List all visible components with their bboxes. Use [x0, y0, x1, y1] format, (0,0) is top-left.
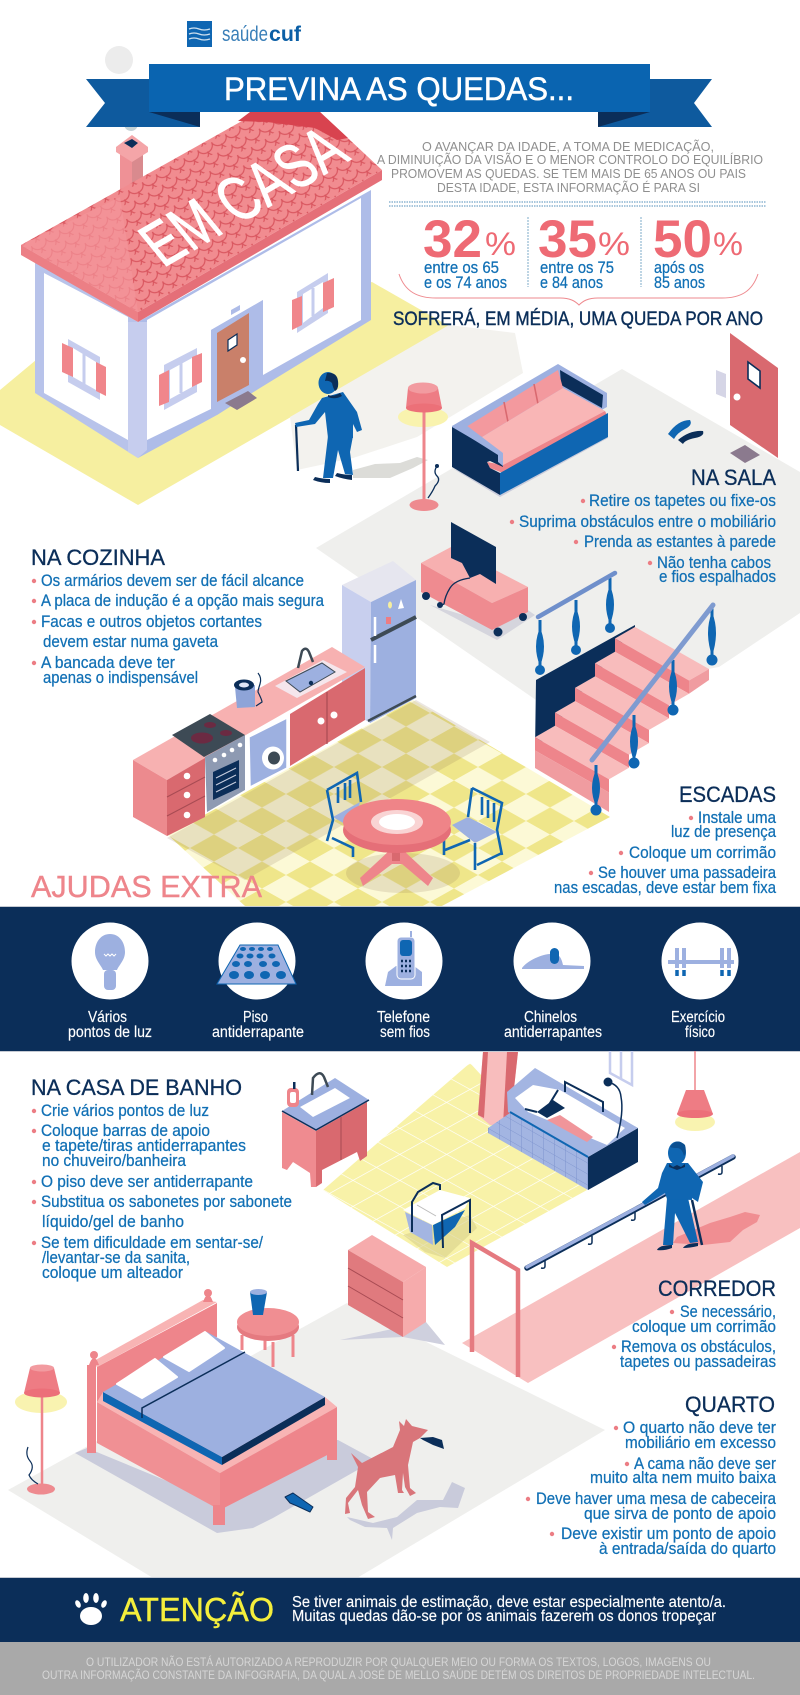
headboard — [97, 1303, 217, 1402]
stove — [172, 714, 245, 812]
list: Se tem dificuldade em sentar-se/ — [41, 1234, 263, 1252]
stat: 35%: % — [598, 226, 630, 262]
sofa back cushions — [466, 370, 563, 437]
handrail — [527, 1156, 733, 1268]
shower curtain — [478, 1052, 518, 1125]
stat: 50%: 85 anos — [654, 274, 705, 292]
hanging lamp — [675, 1051, 715, 1131]
item: exercicio — [662, 922, 738, 1041]
list: A cama não deve ser — [634, 1455, 776, 1473]
doormat — [730, 445, 760, 463]
item: piso: antiderrapante — [212, 1024, 304, 1041]
sofa left arm — [452, 427, 503, 495]
stat: 50% — [653, 210, 743, 292]
stat: 50%: % — [713, 226, 743, 262]
list: O quarto não deve ter — [623, 1419, 776, 1437]
person shadow — [353, 457, 428, 478]
heading: ESCADAS — [679, 782, 776, 807]
kitchen checker floor — [168, 700, 610, 907]
list: tapetes ou passadeiras — [620, 1353, 776, 1371]
item: luz: pontos de luz — [68, 1024, 152, 1041]
intro text: O AVANÇAR DA IDADE, A TOMA DE MEDICAÇÃO, — [422, 139, 714, 154]
intro text — [377, 139, 763, 195]
list: que sirva de ponto de apoio — [584, 1505, 776, 1523]
list — [32, 572, 325, 687]
stat: 50%: 50 — [653, 210, 712, 269]
list: Se houver uma passadeira — [598, 864, 777, 882]
window: left wall — [62, 339, 106, 400]
icon: slipper — [522, 948, 584, 969]
chimney — [116, 135, 148, 205]
list: Coloque barras de apoio — [41, 1122, 210, 1140]
right chair — [444, 788, 502, 870]
fridge — [342, 561, 416, 723]
sink — [275, 649, 347, 698]
message — [292, 1594, 726, 1625]
slipper on floor — [285, 1493, 313, 1512]
floor lamp — [398, 382, 448, 511]
icon: non-slip mat — [217, 945, 296, 984]
panel: atencao band — [0, 1577, 800, 1642]
list: Coloque um corrimão — [629, 844, 776, 862]
item: telefone: Telefone — [377, 1009, 430, 1026]
stats caption: SOFRERÁ, EM MÉDIA, UMA QUEDA POR ANO — [393, 309, 763, 330]
sofa front — [500, 413, 608, 495]
list: Prenda as estantes à parede — [584, 533, 776, 551]
list — [510, 492, 776, 586]
icon: bulb — [95, 934, 125, 990]
list: Não tenha cabos — [657, 554, 771, 572]
list: Substitua os sabonetes por sabonete — [41, 1193, 292, 1211]
doormat — [225, 391, 257, 410]
dog shadow — [347, 1482, 465, 1540]
door frame — [472, 1243, 518, 1377]
list: muito alta nem muito baixa — [590, 1469, 777, 1487]
list: coloque um corrimão — [632, 1318, 776, 1336]
panel: na sala — [510, 465, 776, 586]
sofa frame — [452, 364, 607, 465]
stat: 32%: entre os 65 — [424, 259, 499, 277]
panel: na casa de banho — [31, 1075, 292, 1282]
stat: 32%: % — [485, 226, 516, 262]
stat: 32% — [423, 210, 516, 292]
panel: ajudas extra band — [0, 906, 800, 1052]
list: nas escadas, deve estar bem fixa — [554, 879, 777, 897]
list: Deve haver uma mesa de cabeceira — [536, 1490, 777, 1508]
illustration: house — [21, 112, 382, 458]
window: right wall near — [159, 348, 202, 410]
roof label: EM CASA — [125, 113, 361, 279]
item: exercicio: Exercício — [671, 1009, 725, 1026]
list: mobiliário em excesso — [625, 1434, 776, 1452]
nightstand — [237, 1289, 299, 1367]
item: luz: Vários — [88, 1009, 127, 1026]
list — [612, 1303, 776, 1371]
counter left face — [133, 760, 167, 836]
yellow garden ground — [0, 282, 449, 505]
statistics — [393, 210, 763, 330]
table legs — [360, 850, 433, 886]
illustration: bathroom vanity — [282, 1073, 369, 1187]
item: piso — [212, 922, 304, 1041]
left railing — [535, 573, 615, 675]
stat: 35%: 35 — [538, 210, 597, 269]
heading: CORREDOR — [658, 1276, 776, 1301]
bedside lamp — [15, 1364, 67, 1494]
kitchen counter shadow — [167, 700, 490, 880]
doily — [371, 810, 423, 834]
person holding handrail — [642, 1141, 703, 1250]
dog — [345, 1419, 444, 1519]
shower hose — [608, 1082, 622, 1138]
list: no chuveiro/banheira — [42, 1152, 187, 1170]
chimney smoke — [105, 46, 139, 131]
intro text: A DIMINUIÇÃO DA VISÃO E O MENOR CONTROLO DO EQUILÍBRIO — [377, 152, 763, 167]
footer legal note — [0, 1642, 800, 1695]
right railing — [590, 605, 718, 816]
item: chinelos — [504, 922, 602, 1041]
icon: paw — [74, 1593, 108, 1625]
logo: saúde — [222, 23, 268, 46]
pillows — [117, 1359, 177, 1398]
mattress — [103, 1392, 222, 1465]
panel: escadas — [554, 782, 777, 897]
counter drawers — [167, 758, 205, 836]
panel: quarto — [526, 1392, 777, 1558]
list — [554, 809, 777, 897]
list: A placa de indução é a opção mais segura — [41, 592, 325, 610]
brace — [399, 274, 758, 305]
item: luz — [68, 922, 152, 1041]
right wall — [138, 190, 371, 458]
sofa lip — [487, 411, 607, 473]
entrance door — [716, 333, 778, 458]
title ribbon — [86, 64, 712, 127]
list: líquido/gel de banho — [42, 1213, 184, 1231]
bathroom floor — [323, 1063, 587, 1267]
living room floor — [316, 369, 800, 700]
heading: ATENÇÃO — [120, 1591, 274, 1628]
window: right wall far — [292, 273, 334, 333]
left wall — [35, 262, 138, 458]
message: Se tiver animais de estimação, deve estar especialmente atento/a. — [292, 1594, 726, 1611]
list: e tapete/tiras antiderrapantes — [42, 1137, 246, 1155]
icon: barbell — [668, 948, 734, 976]
stat: 50%: após os — [654, 259, 704, 277]
panel: na cozinha — [31, 545, 325, 687]
stat: 32%: 32 — [423, 210, 482, 269]
bathroom window — [610, 1051, 632, 1085]
stat: 35%: entre os 75 — [540, 259, 614, 277]
intro text: PROMOVEM AS QUEDAS. SE TEM MAIS DE 65 ANOS OU PAIS — [391, 166, 746, 181]
counter top — [133, 647, 365, 780]
list: apenas o indispensável — [43, 669, 198, 687]
washing machine — [249, 718, 287, 787]
toilet seat raiser — [403, 1183, 477, 1258]
gray entrance path — [290, 325, 523, 470]
list: A bancada deve ter — [41, 654, 175, 672]
heading: QUARTO — [685, 1392, 775, 1417]
person walking with cane — [295, 372, 362, 483]
bath seat — [537, 1100, 565, 1118]
list: Retire os tapetes ou fixe-os — [589, 492, 776, 510]
list: luz de presença — [671, 823, 777, 841]
item: exercicio: físico — [685, 1024, 715, 1041]
heading: NA COZINHA — [31, 545, 165, 570]
intro text: DESTA IDADE, ESTA INFORMAÇÃO É PARA SI — [437, 180, 700, 195]
kettle — [234, 673, 262, 708]
table and chairs — [327, 773, 502, 893]
item: piso: Piso — [243, 1009, 268, 1026]
sofa — [452, 364, 608, 497]
heading: NA SALA — [691, 465, 776, 490]
roof — [21, 112, 382, 322]
person shadow on corridor — [673, 1212, 760, 1245]
heading: NA CASA DE BANHO — [31, 1075, 242, 1100]
list: O piso deve ser antiderrapante — [41, 1173, 253, 1191]
list: devem estar numa gaveta — [43, 633, 219, 651]
list: coloque um alteador — [42, 1264, 183, 1282]
list: /levantar-se da sanita, — [42, 1249, 190, 1267]
logo — [187, 21, 302, 47]
stairs — [535, 573, 718, 816]
section heading: ajudas extra: AJUDAS EXTRA — [31, 869, 262, 904]
logo: cuf — [269, 23, 302, 46]
stat: 32%: e os 74 anos — [424, 274, 507, 292]
stat: 35% — [538, 210, 630, 292]
corridor floor — [462, 1152, 800, 1383]
bed — [87, 1289, 337, 1525]
dresser — [340, 1235, 445, 1345]
item: chinelos: antiderrapantes — [504, 1024, 602, 1041]
cup — [250, 1292, 267, 1315]
footer legal note: O UTILIZADOR NÃO ESTÁ AUTORIZADO A REPRODUZIR POR QUALQUER MEIO OU FORMA OS TEXTOS, LOGOS, IMAGENS OU — [86, 1654, 711, 1669]
list: Os armários devem ser de fácil alcance — [41, 572, 304, 590]
item: telefone — [366, 922, 442, 1041]
left chair — [327, 773, 361, 857]
cupboards — [290, 668, 365, 766]
title text: PREVINA AS QUEDAS... — [224, 71, 574, 107]
list — [526, 1419, 777, 1558]
slippers — [668, 420, 703, 444]
bedroom floor — [8, 1303, 605, 1578]
stat: 35%: e 84 anos — [540, 274, 603, 292]
slipper in mouth — [420, 1437, 444, 1449]
list: Instale uma — [698, 809, 777, 827]
list: Se necessário, — [680, 1303, 776, 1321]
list: Remova os obstáculos, — [621, 1338, 776, 1356]
illustration: kitchen — [133, 561, 416, 836]
list: Facas e outros objetos cortantes — [41, 613, 262, 631]
table top — [343, 807, 451, 853]
bathtub — [488, 1068, 638, 1190]
list: e fios espalhados — [659, 568, 776, 586]
panel: corredor — [612, 1276, 776, 1371]
sofa seat — [482, 388, 605, 465]
list: Suprima obstáculos entre o mobiliário — [519, 513, 776, 531]
icon: phone — [385, 931, 422, 986]
message: Muitas quedas dão-se por os animais fazerem os donos tropeçar — [292, 1608, 716, 1625]
list: Deve existir um ponto de apoio — [561, 1525, 776, 1543]
frame — [97, 1392, 337, 1473]
bed shadow — [75, 1440, 375, 1533]
list: à entrada/saída do quarto — [599, 1540, 776, 1558]
door — [211, 300, 263, 415]
item: chinelos: Chinelos — [524, 1009, 577, 1026]
tv on stand — [421, 522, 535, 640]
list — [32, 1102, 292, 1282]
list: Crie vários pontos de luz — [41, 1102, 209, 1120]
item: telefone: sem fios — [380, 1024, 430, 1041]
